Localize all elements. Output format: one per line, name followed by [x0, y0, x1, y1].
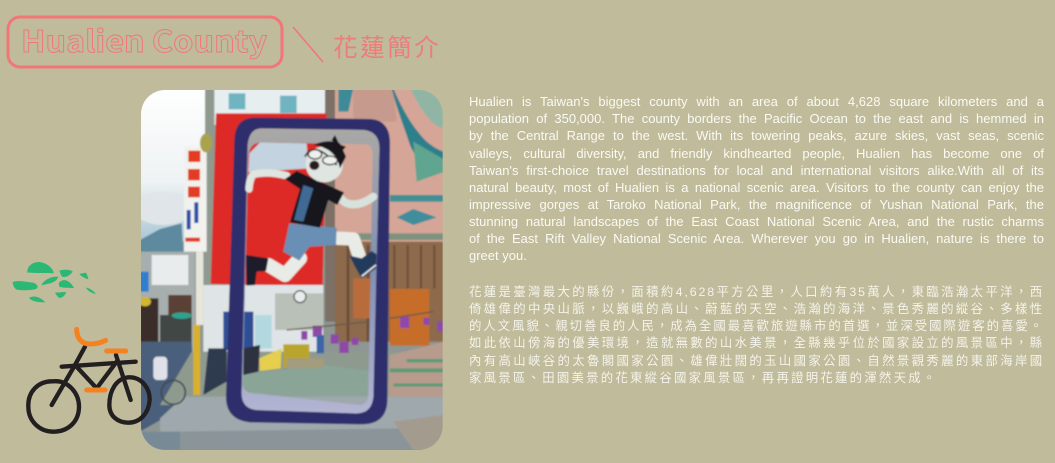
English description text block: impressive gorges at Taroko National Park, the magnificence of Yushan National Park, the — [469, 197, 1044, 212]
English description text block: Taiwan's first-choice travel destinations for local and international visitors alike.With all of its — [469, 163, 1044, 178]
English description text block: Hualien is Taiwan's biggest county with an area of about 4,628 square kilometers and a — [469, 94, 1044, 109]
title badge: Hualien County — [8, 17, 282, 67]
English description text block: population of 350,000. The county borders the Pacific Ocean to the east and is hemmed in — [469, 111, 1044, 126]
icon: green leaves — [13, 262, 96, 302]
English description text block: stunning natural landscapes of the East Coast National Scenic Area, and the rustic charms — [469, 214, 1044, 229]
Chinese description text block: 如此依山傍海的優美環境，造就無數的山水美景，全縣幾乎位於國家設立的風景區中，縣 — [469, 336, 1044, 350]
English description text block: greet you. — [469, 248, 527, 263]
title badge: Hualien County: Hualien County — [21, 19, 267, 61]
phone-shaped frame sculpture — [226, 118, 390, 424]
photo: jumping figure statue in phone frame on a Hualien street — [133, 85, 450, 455]
English description text block — [469, 94, 1044, 263]
Chinese description text block: 內有高山峽谷的太魯閣國家公園、雄偉壯闊的玉山國家公園、自然景觀秀麗的東部海岸國 — [469, 354, 1044, 368]
English description text block: by the Central Range to the west. With its towering peaks, azure skies, vast seas, scenic — [469, 128, 1044, 143]
English description text block: of the East Rift Valley National Scenic Area. Wherever you go in Hualien, nature is there to — [469, 231, 1044, 246]
storefront clutter — [153, 134, 443, 404]
Chinese description text block: 花蓮是臺灣最大的縣份，面積約4,628平方公里，人口約有35萬人，東臨浩瀚太平洋，西 — [469, 285, 1044, 299]
icon: bicycle — [28, 329, 150, 432]
English description text block: natural beauty, most of Hualien is a national scenic area. Visitors to the county can enjoy the — [469, 180, 1044, 195]
subtitle: 花蓮簡介: 花蓮簡介 — [333, 34, 441, 62]
English description text block: valleys, cultural diversity, and friendly kindhearted people, Hualien has become one of — [469, 146, 1044, 161]
Chinese description text block: 倚雄偉的中央山脈，以巍峨的高山、蔚藍的天空、浩瀚的海洋、景色秀麗的縱谷、多樣性 — [469, 302, 1044, 316]
Chinese description text block: 的人文風貌、親切善良的人民，成為全國最喜歡旅遊縣市的首選，並深受國際遊客的喜愛。 — [469, 319, 1044, 333]
photo background street scene — [133, 85, 450, 455]
illustration layer: title, photo and icons — [6, 16, 443, 450]
slash divider — [293, 27, 323, 62]
Chinese description text block: 家風景區、田園美景的花東縱谷國家風景區，再再證明花蓮的渾然天成。 — [469, 371, 938, 385]
Chinese description text block — [469, 285, 1044, 385]
cartoon figure jumping through frame — [246, 135, 377, 286]
